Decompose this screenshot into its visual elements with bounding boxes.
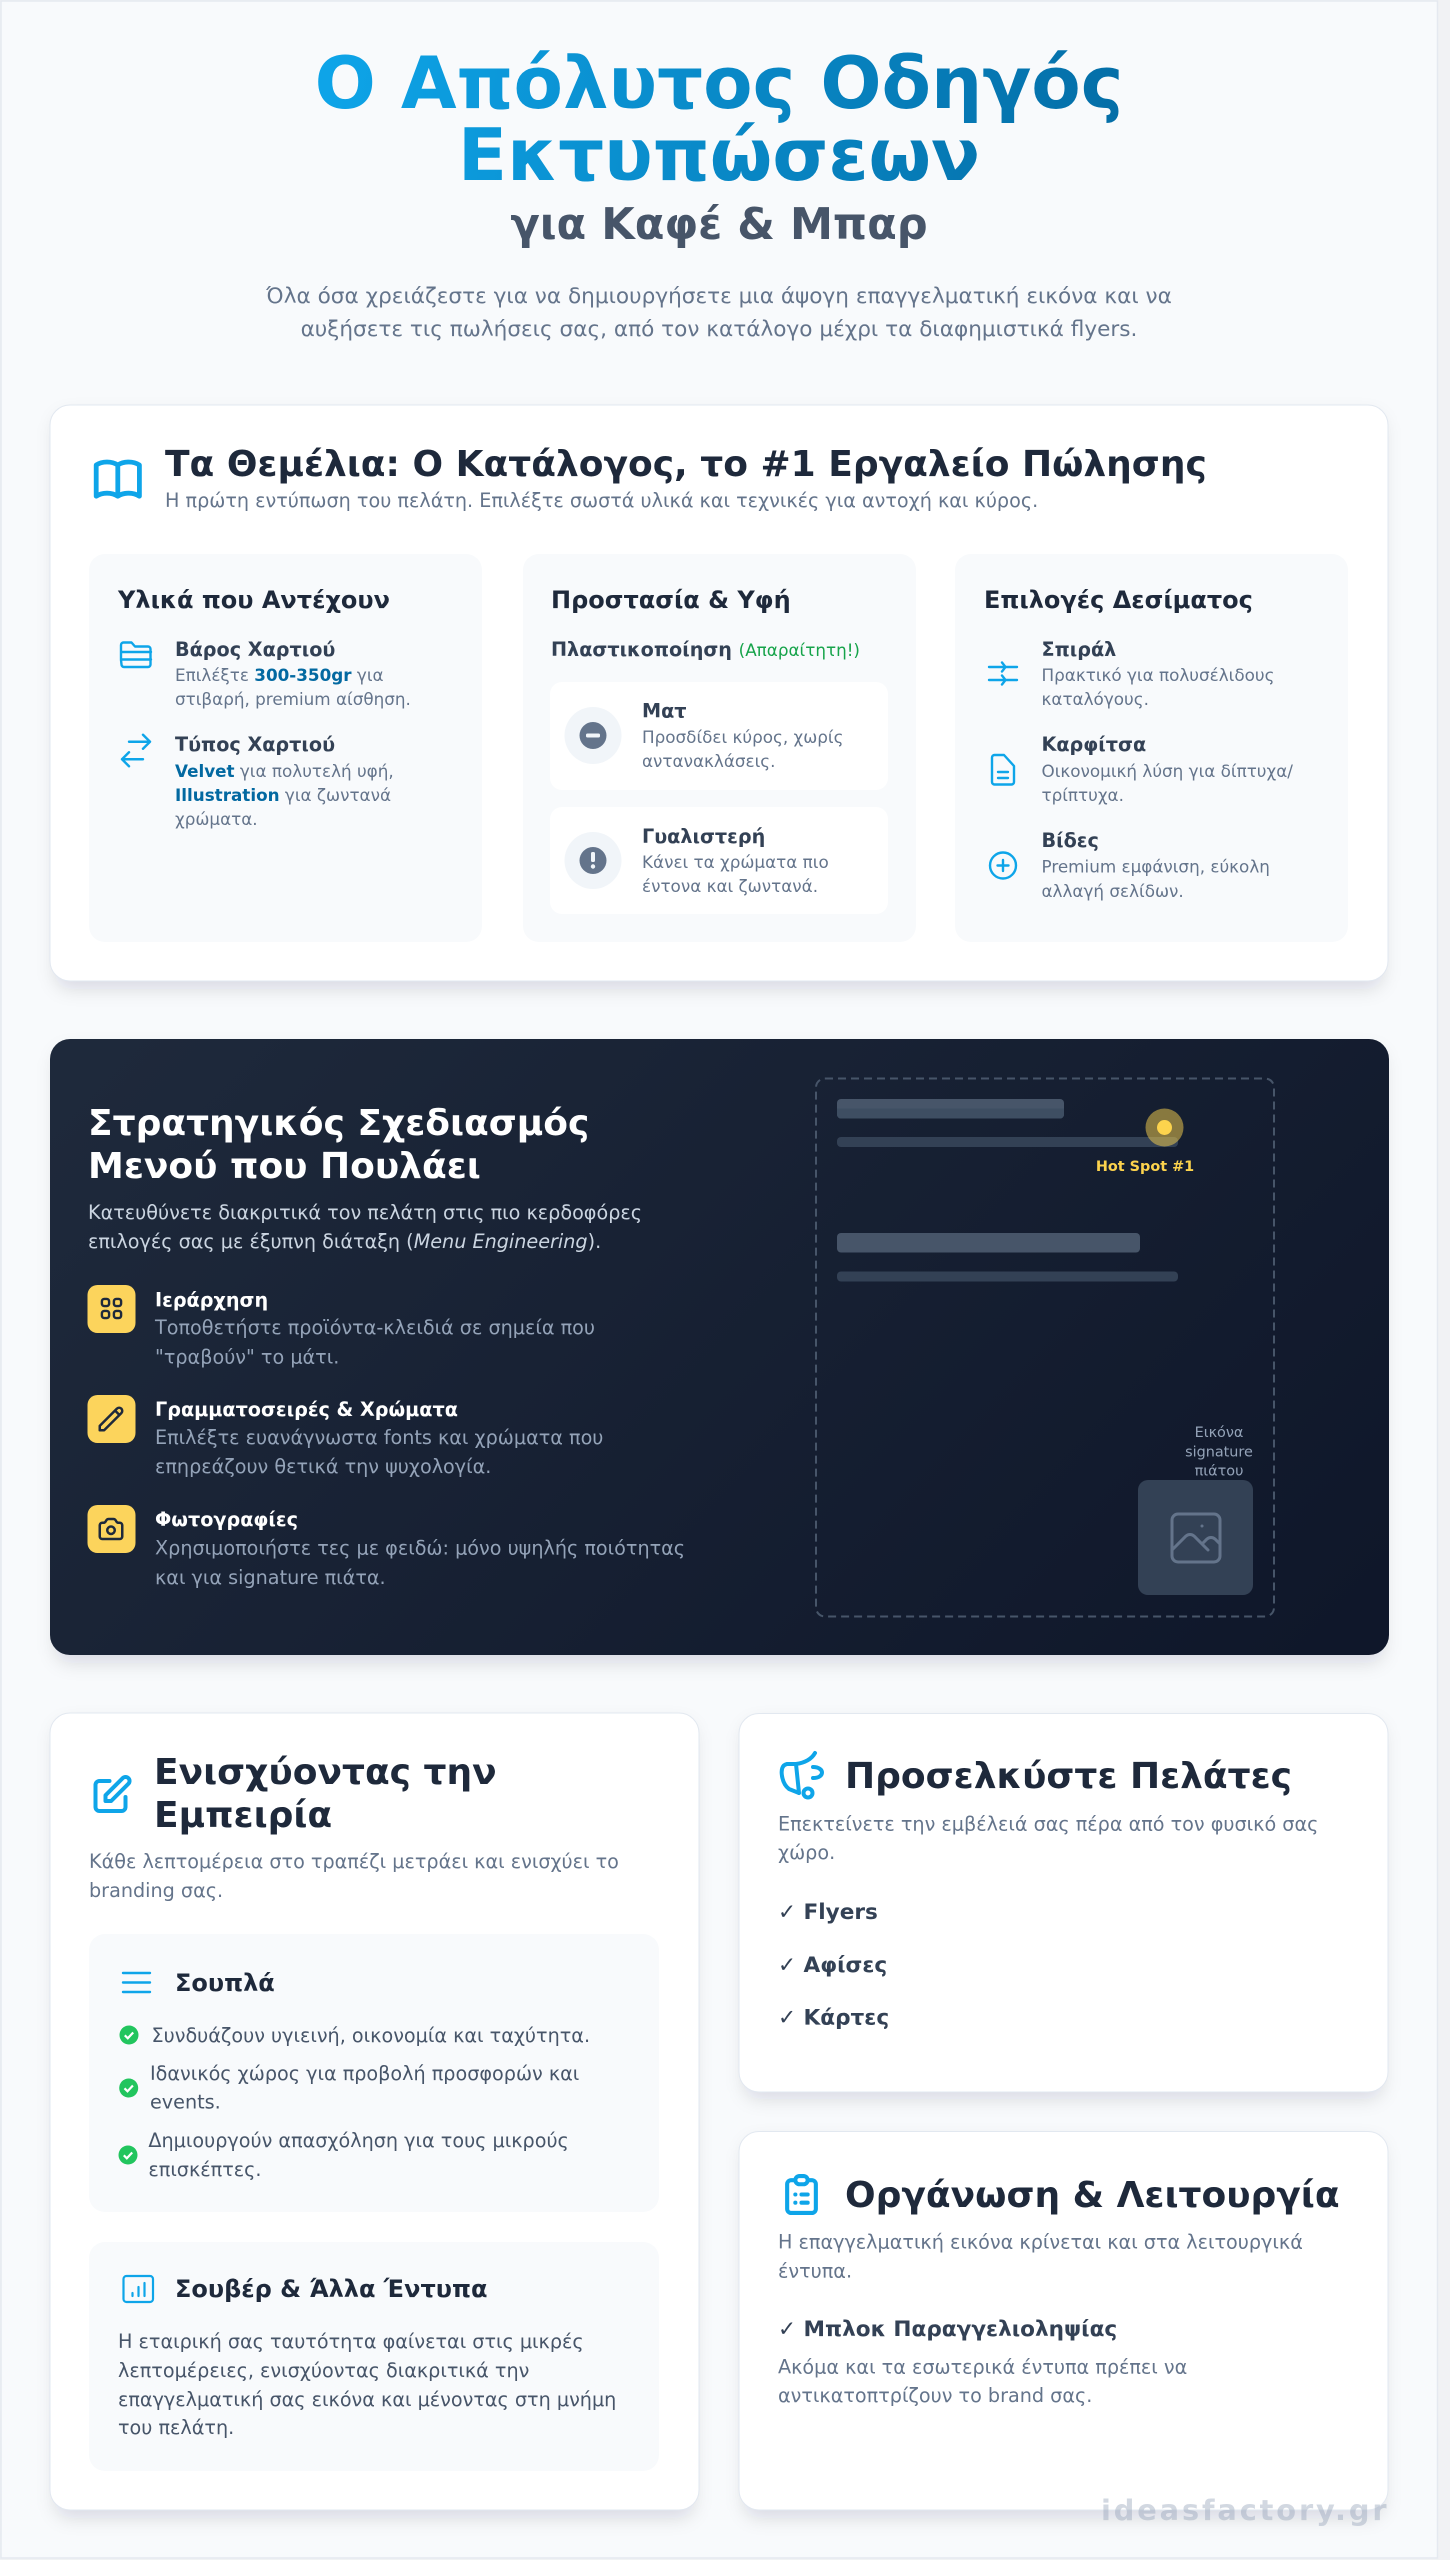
heading: Οργάνωση & Λειτουργία bbox=[845, 2175, 1340, 2216]
checklist: Αφίσες bbox=[804, 1953, 887, 1978]
sub-panel: coasters and other prints bbox=[89, 2242, 659, 2471]
heading bbox=[154, 1752, 497, 1836]
spiral: Πρακτικό για πολυσέλιδους bbox=[1042, 665, 1274, 685]
item: photographs: και για signature πιάτα. bbox=[155, 1566, 386, 1589]
paper type bbox=[175, 733, 394, 829]
heading: Ενισχύοντας την bbox=[154, 1752, 497, 1793]
benefit 2: Ιδανικός χώρος για προβολή προσφορών και bbox=[150, 2062, 579, 2085]
description: του πελάτη. bbox=[118, 2416, 234, 2439]
item: photographs: Φωτογραφίες bbox=[155, 1508, 298, 1531]
item: photographs bbox=[88, 1505, 685, 1589]
staple: Καρφίτσα bbox=[1042, 733, 1146, 756]
description: Η εταιρική σας ταυτότητα φαίνεται στις μικρές bbox=[118, 2330, 584, 2353]
card: gloss: Γυαλιστερή bbox=[642, 825, 765, 848]
card: matte: Ματ bbox=[642, 700, 687, 722]
icon: spiral sliders bbox=[989, 662, 1017, 684]
checklist: Flyers bbox=[804, 1900, 878, 1925]
item: hierarchy: "τραβούν" το μάτι. bbox=[155, 1346, 339, 1368]
paper type: Velvet για πολυτελή υφή, bbox=[175, 761, 394, 781]
icon: pencil bbox=[88, 1395, 136, 1443]
description bbox=[778, 1812, 1318, 1864]
panel: protection and texture: Πλαστικοποίηση (Απαραίτητη!) bbox=[551, 638, 860, 661]
panel: protection and texture bbox=[523, 554, 916, 942]
description bbox=[89, 1850, 619, 1902]
heading: Τα Θεμέλια: Ο Κατάλογος, το #1 Εργαλείο Πώλησης bbox=[165, 444, 1207, 485]
icon: swap arrows bbox=[122, 735, 150, 766]
paper type: χρώματα. bbox=[175, 809, 258, 829]
description bbox=[118, 2330, 616, 2439]
heading: Στρατηγικός Σχεδιασμός bbox=[88, 1103, 589, 1144]
description: Κατευθύνετε διακριτικά τον πελάτη στις πιο κερδοφόρες bbox=[88, 1201, 642, 1224]
description bbox=[778, 2230, 1303, 2282]
card: gloss bbox=[550, 807, 888, 914]
checklist: Κάρτες bbox=[804, 2006, 889, 2030]
panel: materials bbox=[89, 554, 482, 942]
heading: Προσελκύστε Πελάτες bbox=[845, 1756, 1292, 1797]
menu wireframe bbox=[816, 1078, 1274, 1616]
card: matte: Προσδίδει κύρος, χωρίς bbox=[642, 727, 843, 747]
panel: materials: Υλικά που Αντέχουν bbox=[117, 586, 390, 614]
description: λεπτομέρειες, ενισχύοντας διακριτικά την bbox=[118, 2359, 529, 2382]
order pad item: Μπλοκ Παραγγελιοληψίας bbox=[804, 2317, 1117, 2342]
icon: chart square bbox=[124, 2276, 153, 2302]
description bbox=[88, 1201, 642, 1253]
wireframe text bars bbox=[837, 1099, 1178, 1282]
benefit 2 bbox=[119, 2062, 579, 2114]
order pad description bbox=[778, 2356, 1187, 2407]
checklist: ✓ bbox=[778, 1900, 796, 1925]
paper weight: Βάρος Χαρτιού bbox=[175, 638, 335, 661]
description: Κάθε λεπτομέρεια στο τραπέζι μετράει και ενισχύει το bbox=[89, 1850, 619, 1873]
hot spot label: Hot Spot #1 bbox=[1096, 1159, 1194, 1175]
benefit 3: Δημιουργούν απασχόληση για τους μικρούς bbox=[148, 2129, 569, 2152]
heading description: Η πρώτη εντύπωση του πελάτη. Επιλέξτε σωστά υλικά και τεχνικές για αντοχή και κύρος. bbox=[165, 489, 1038, 512]
checklist: ✓ bbox=[778, 2006, 796, 2030]
subtitle: για Καφέ & Μπαρ bbox=[510, 200, 928, 250]
panel: binding options: Επιλογές Δεσίματος bbox=[984, 586, 1253, 614]
panel: foundations catalogue bbox=[50, 405, 1388, 989]
item: photographs: Χρησιμοποιήστε τες με φειδώ: μόνο υψηλής ποιότητας bbox=[155, 1536, 685, 1560]
panel: enhancing the experience bbox=[50, 1713, 699, 2518]
panel: binding options bbox=[955, 554, 1348, 942]
sub-panel: coasters and other prints: Σουβέρ & Άλλα Έντυπα bbox=[175, 2275, 487, 2303]
icon: clipboard bbox=[787, 2176, 816, 2213]
panel: strategic menu design bbox=[50, 1039, 1389, 1663]
description: επιλογές σας με έξυπνη διάταξη (Menu Engineering). bbox=[88, 1230, 601, 1253]
card: gloss: έντονα και ζωντανά. bbox=[642, 876, 818, 896]
item: fonts and colours bbox=[88, 1395, 603, 1478]
paper weight: στιβαρή, premium αίσθηση. bbox=[175, 689, 411, 709]
spiral: καταλόγους. bbox=[1042, 689, 1149, 709]
signature dish caption: πιάτου bbox=[1195, 1464, 1243, 1480]
image placeholder bbox=[1138, 1480, 1253, 1595]
signature dish caption bbox=[1185, 1425, 1253, 1480]
heading: Εμπειρία bbox=[154, 1795, 332, 1836]
paper weight: Επιλέξτε 300-350gr για bbox=[175, 665, 384, 685]
icon: folder bbox=[121, 642, 151, 667]
title: Εκτυπώσεων bbox=[458, 113, 980, 197]
order pad description: Ακόμα και τα εσωτερικά έντυπα πρέπει να bbox=[778, 2356, 1187, 2378]
screws: αλλαγή σελίδων. bbox=[1042, 881, 1184, 901]
item: hierarchy bbox=[88, 1285, 595, 1368]
hot spot marker bbox=[1146, 1108, 1184, 1146]
description: Η επαγγελματική εικόνα κρίνεται και στα λειτουργικά bbox=[778, 2230, 1303, 2254]
benefit 1: Συνδυάζουν υγιεινή, οικονομία και ταχύτητα. bbox=[152, 2024, 590, 2047]
panel: attract customers bbox=[739, 1714, 1388, 2099]
item: fonts and colours: Γραμματοσειρές & Χρώματα bbox=[155, 1398, 458, 1421]
description: Επεκτείνετε την εμβέλειά σας πέρα από τον φυσικό σας bbox=[778, 1812, 1318, 1836]
screws: Premium εμφάνιση, εύκολη bbox=[1042, 856, 1270, 876]
icon: minus circle bbox=[564, 707, 622, 764]
panel: organisation and operation bbox=[739, 2132, 1388, 2518]
description: χώρο. bbox=[778, 1841, 835, 1864]
heading bbox=[88, 1103, 589, 1187]
paper type: Illustration για ζωντανά bbox=[175, 785, 391, 805]
checklist: ✓ bbox=[778, 1953, 796, 1978]
item: hierarchy: Τοποθετήστε προϊόντα-κλειδιά σε σημεία που bbox=[154, 1316, 595, 1339]
benefit 3: επισκέπτες. bbox=[148, 2158, 261, 2181]
screws bbox=[1042, 829, 1270, 901]
icon: menu lines bbox=[123, 1973, 150, 1992]
description: επαγγελματική σας εικόνα και μένοντας στη μνήμη bbox=[118, 2388, 616, 2411]
icon: document bbox=[992, 755, 1014, 784]
icon: megaphone bbox=[782, 1753, 822, 1798]
order pad item: ✓ bbox=[778, 2317, 796, 2342]
description: branding σας. bbox=[89, 1879, 223, 1902]
item: fonts and colours: Επιλέξτε ευανάγνωστα fonts και χρώματα που bbox=[155, 1426, 603, 1449]
paper type: Τύπος Χαρτιού bbox=[175, 733, 335, 756]
watermark: ideasfactory.gr bbox=[1101, 2493, 1389, 2527]
icon: camera bbox=[88, 1505, 136, 1553]
panel: protection and texture: Προστασία & Υφή bbox=[551, 586, 791, 614]
icon: plus circle bbox=[990, 852, 1016, 878]
spiral: Σπιράλ bbox=[1042, 638, 1116, 661]
spiral bbox=[1042, 638, 1274, 709]
icon: edit bbox=[96, 1777, 130, 1811]
checklist bbox=[778, 1900, 889, 2030]
card: matte bbox=[550, 682, 888, 790]
description: έντυπα. bbox=[778, 2260, 852, 2282]
title: Ο Απόλυτος Οδηγός bbox=[315, 41, 1123, 125]
icon: exclamation circle bbox=[564, 832, 622, 889]
staple: Οικονομική λύση για δίπτυχα/ bbox=[1042, 761, 1293, 781]
item: hierarchy: Ιεράρχηση bbox=[155, 1288, 268, 1312]
staple bbox=[1042, 733, 1293, 805]
sub-panel: placemats bbox=[89, 1934, 659, 2212]
icon: grid bbox=[88, 1285, 136, 1333]
intro paragraph: αυξήσετε τις πωλήσεις σας, από τον κατάλογο μέχρι τα διαφημιστικά flyers. bbox=[301, 317, 1137, 342]
card: matte: αντανακλάσεις. bbox=[642, 751, 776, 771]
benefit 2: events. bbox=[150, 2090, 221, 2114]
card: gloss: Κάνει τα χρώματα πιο bbox=[642, 852, 829, 872]
sub-panel: placemats: Σουπλά bbox=[175, 1969, 275, 1997]
benefit 3 bbox=[118, 2129, 569, 2181]
intro paragraph bbox=[265, 284, 1172, 342]
screws: Βίδες bbox=[1042, 829, 1099, 852]
signature dish caption: signature bbox=[1185, 1444, 1253, 1460]
header bbox=[265, 41, 1172, 342]
staple: τρίπτυχα. bbox=[1042, 785, 1124, 805]
icon: book bbox=[96, 462, 139, 496]
item: fonts and colours: επηρεάζουν θετικά την ψυχολογία. bbox=[155, 1455, 491, 1478]
heading: Μενού που Πουλάει bbox=[88, 1146, 481, 1187]
order pad description: αντικατοπτρίζουν το brand σας. bbox=[778, 2384, 1092, 2407]
signature dish caption: Εικόνα bbox=[1195, 1425, 1243, 1441]
intro paragraph: Όλα όσα χρειάζεστε για να δημιουργήσετε μια άψογη επαγγελματική εικόνα και να bbox=[265, 284, 1172, 309]
paper weight bbox=[175, 638, 411, 709]
title bbox=[315, 41, 1123, 197]
